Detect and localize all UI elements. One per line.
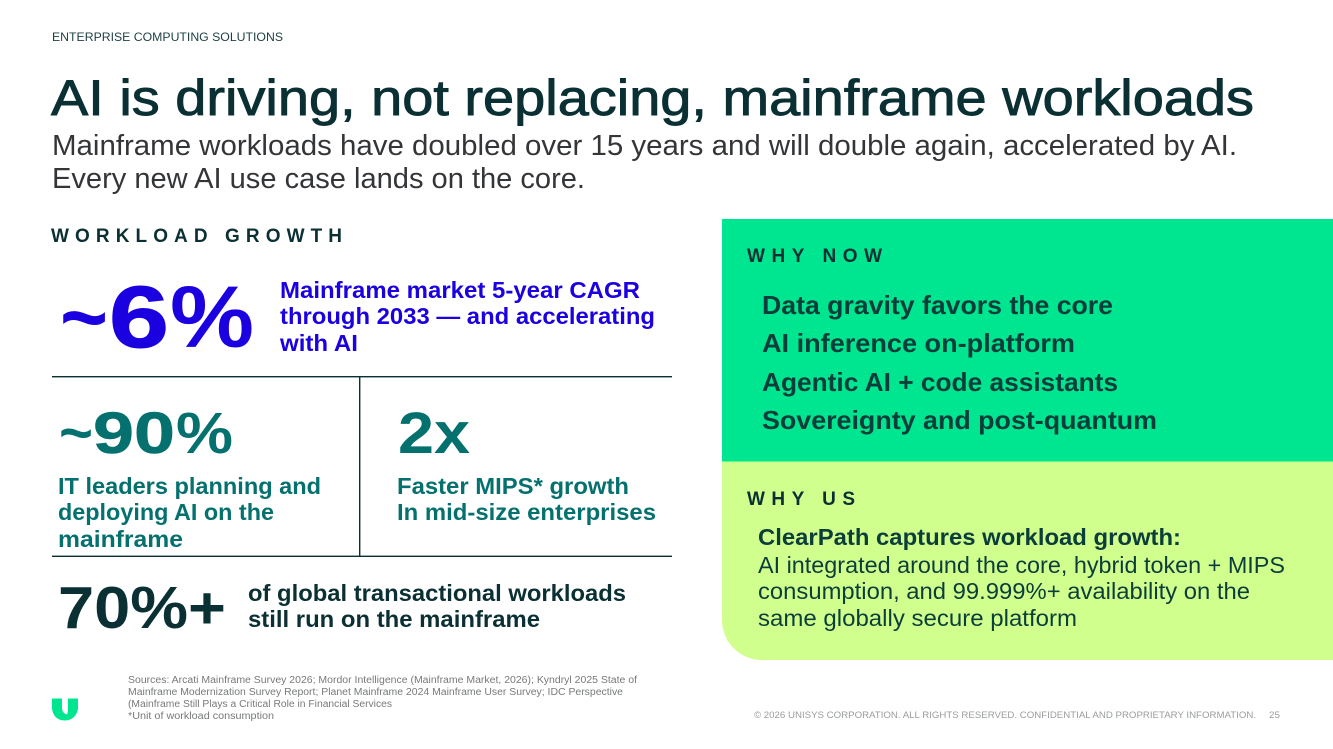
- why now list: Sovereignty and post-quantum: [762, 405, 1157, 435]
- stat: 70 percent of transactional workloads: of global transactional workloads: [248, 580, 626, 606]
- panel: why now: [722, 219, 1333, 462]
- sources footnote: [128, 675, 637, 722]
- subtitle: Mainframe workloads have doubled over 15 years and will double again, accelerated by AI.: [52, 130, 1237, 162]
- why now list: [762, 290, 1157, 435]
- title: AI is driving, not replacing, mainframe workloads: [51, 70, 1254, 126]
- stat: 90 percent of IT leaders: %: [176, 401, 233, 466]
- stat: 6 percent CAGR: 6: [109, 269, 169, 366]
- panel: why us: [722, 462, 1333, 660]
- stat: 6 percent CAGR: [60, 269, 655, 366]
- stat: 2x MIPS growth: [397, 401, 656, 525]
- heading: why us: WHY US: [747, 489, 855, 510]
- stat: 2x MIPS growth: Faster MIPS* growth: [397, 473, 629, 499]
- stat: 6 percent CAGR: with AI: [279, 330, 358, 356]
- stat: 70 percent of transactional workloads: 70%+: [58, 575, 226, 641]
- section label: ENTERPRISE COMPUTING SOLUTIONS: [52, 30, 283, 44]
- stat: 6 percent CAGR: through 2033 — and accelerating: [280, 303, 655, 329]
- why now list: Agentic AI + code assistants: [762, 367, 1118, 397]
- stat: 6 percent CAGR: %: [170, 269, 254, 366]
- why us body text: AI integrated around the core, hybrid token + MIPS: [758, 552, 1285, 578]
- sources footnote: Sources: Arcati Mainframe Survey 2026; Mordor Intelligence (Mainframe Market, 2026); Kyndryl 2025 State of: [128, 675, 637, 686]
- stat: 90 percent of IT leaders: IT leaders planning and: [58, 473, 321, 499]
- sources footnote: (Mainframe Still Plays a Critical Role in Financial Services: [128, 699, 392, 710]
- sources footnote: *Unit of workload consumption: [128, 711, 274, 722]
- stat: 90 percent of IT leaders: 90: [93, 401, 175, 466]
- stat: 90 percent of IT leaders: mainframe: [58, 526, 183, 552]
- heading: why now: WHY NOW: [747, 246, 882, 267]
- why us body text: [758, 524, 1285, 631]
- stat: 6 percent CAGR: Mainframe market 5-year CAGR: [280, 277, 640, 303]
- icon: Unisys logo: [52, 698, 78, 720]
- subtitle: Every new AI use case lands on the core.: [52, 163, 585, 195]
- why us body text: ClearPath captures workload growth:: [758, 524, 1181, 550]
- copyright footer: © 2026 UNISYS CORPORATION. ALL RIGHTS RESERVED. CONFIDENTIAL AND PROPRIETARY INFORMATION.: [754, 710, 1256, 720]
- why us body text: same globally secure platform: [758, 605, 1077, 631]
- stat: 70 percent of transactional workloads: still run on the mainframe: [248, 606, 540, 632]
- why now list: Data gravity favors the core: [762, 290, 1113, 320]
- stat: 6 percent CAGR: ~: [60, 269, 108, 366]
- heading: workload growth: WORKLOAD GROWTH: [51, 226, 342, 247]
- stat: 90 percent of IT leaders: ~: [59, 401, 93, 466]
- why us body text: consumption, and 99.999%+ availability on the: [758, 578, 1250, 604]
- sources footnote: Mainframe Modernization Survey Report; Planet Mainframe 2024 Mainframe User Survey; IDC Perspective: [128, 687, 623, 698]
- page number: 25: [1269, 710, 1280, 720]
- stat: 90 percent of IT leaders: deploying AI on the: [58, 499, 274, 525]
- stat: 2x MIPS growth: In mid-size enterprises: [397, 499, 656, 525]
- subtitle: [52, 130, 1237, 195]
- panel: workload growth: [51, 226, 672, 641]
- why now list: AI inference on-platform: [762, 328, 1075, 358]
- stat: 70 percent of transactional workloads: [58, 575, 626, 641]
- stat: 2x MIPS growth: 2x: [398, 401, 470, 466]
- stat: 90 percent of IT leaders: [58, 401, 321, 552]
